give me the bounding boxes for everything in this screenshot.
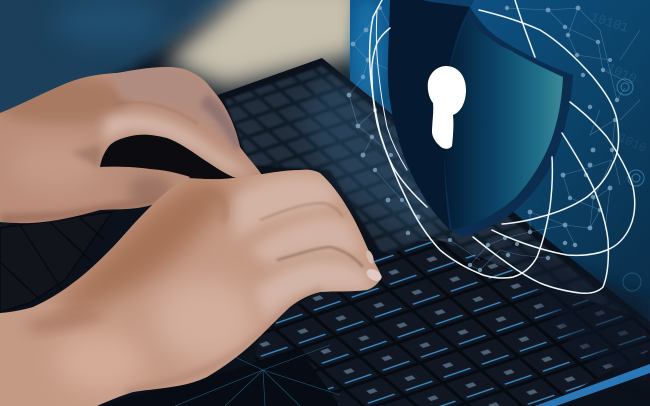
shield front face [443, 17, 563, 230]
bottom network star [175, 345, 340, 406]
bottom-right blue edge [535, 364, 650, 406]
top-left blue glow [55, 0, 165, 46]
network dots [347, 6, 619, 272]
binary digits third: 1010 [616, 131, 648, 156]
orbit E [372, 28, 427, 207]
far finger shadow [200, 94, 242, 150]
near keys [245, 236, 650, 406]
left strip glow [352, 0, 384, 100]
beige blurred desk [165, 0, 365, 88]
finger crease 1 [260, 203, 343, 220]
thumb web shade [72, 145, 100, 168]
gap between fingers of the upper hand [100, 130, 240, 182]
orbit G [376, 10, 407, 170]
fingernail ring [365, 267, 383, 283]
lower hand [0, 160, 390, 406]
left keyboard keys [0, 212, 112, 312]
hand lower highlight [155, 280, 255, 360]
orbit lines [370, 0, 635, 293]
top-left blurred blue area [0, 0, 280, 130]
knuckle crease under far finger [126, 102, 198, 124]
wrist dark crease [26, 312, 102, 336]
orbit B [492, 102, 635, 255]
middle finger highlight [250, 217, 365, 265]
thumb underside shade [0, 198, 157, 223]
far finger [110, 66, 242, 150]
fingernail middle [365, 249, 375, 265]
orbit D [370, 0, 552, 278]
shield top sliver [422, 0, 474, 7]
upper hand [0, 67, 262, 224]
right blue panel [350, 0, 650, 345]
right corner keyboard darkening [500, 235, 650, 390]
binary digits: 10101 [589, 10, 631, 36]
knuckle shade [222, 203, 228, 221]
shield front rim [444, 7, 573, 237]
orbit A [479, 10, 619, 224]
far keys [225, 66, 640, 345]
thumb shade [128, 175, 172, 205]
target rings [617, 79, 644, 291]
far keys blue haze [300, 70, 480, 240]
network lines [349, 8, 640, 270]
shield [388, 0, 573, 237]
index finger highlight [103, 114, 255, 176]
wrist highlight [55, 332, 145, 392]
lower hand base [0, 160, 390, 406]
orbit F [515, 0, 535, 57]
upper hand base [0, 67, 262, 224]
shield back panel [388, 0, 474, 230]
keyhole [428, 66, 466, 149]
fingers highlight [235, 175, 337, 240]
palm highlight [19, 144, 108, 186]
upper hand back shading [0, 76, 130, 124]
finger crease 2 [277, 247, 363, 267]
ring finger highlight [255, 261, 372, 320]
back of hand dark tone [60, 178, 240, 318]
hand lower edge shade [125, 286, 322, 396]
binary digits lower: 1010 [604, 60, 639, 87]
orbit C [473, 133, 608, 293]
bottom-left dark area [95, 350, 340, 406]
